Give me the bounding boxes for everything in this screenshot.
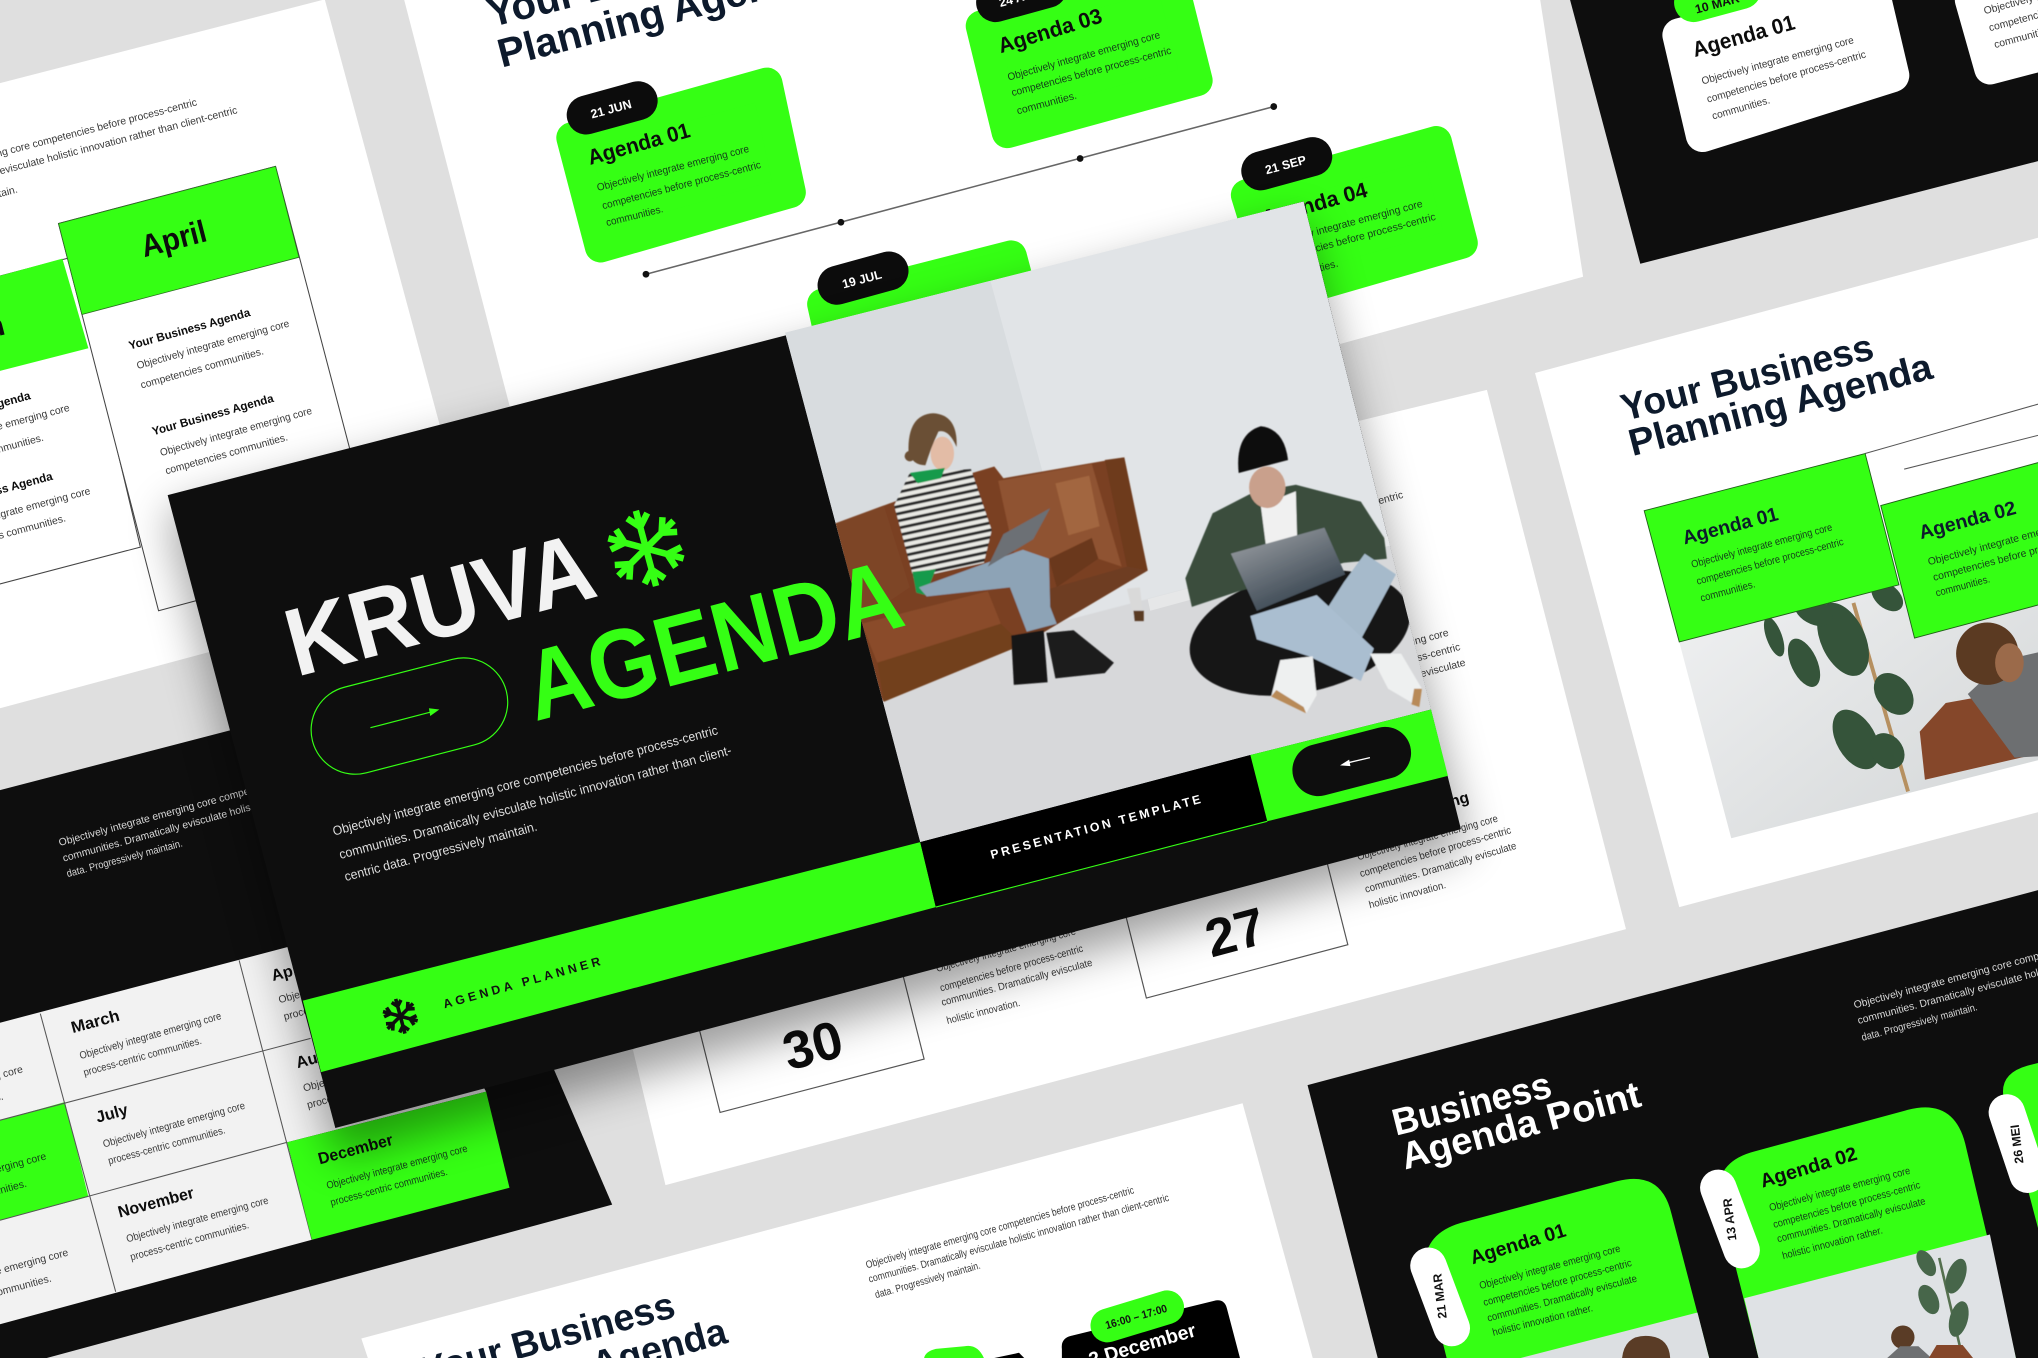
- panel: dark agenda slide top-right: [1570, 0, 2038, 264]
- April column card: competencies communities.: [164, 432, 289, 477]
- cell: March: March: [69, 1007, 122, 1037]
- card: Agenda 01: Objectively integrate emerging core: [596, 144, 751, 194]
- date box 27: [1118, 832, 1348, 998]
- cell: July: process-centric communities.: [107, 1125, 227, 1167]
- text block beside 27: Objectively integrate emerging core: [1356, 814, 1500, 863]
- card: Agenda 02: [823, 256, 1040, 403]
- card: Agenda 02: holistic innovation rather.: [1781, 1225, 1884, 1262]
- slide heading: Planning Agenda: [1624, 345, 1938, 464]
- cell: August partial: Objectively integrate emerging core: [302, 1042, 463, 1094]
- card: Agenda 01: Agenda 01: [585, 118, 693, 170]
- cover description: Objectively integrate emerging core competencies before process-centric: [331, 722, 720, 838]
- panel: business agenda point slide bottom-right: [1308, 890, 2038, 1358]
- card: Agenda 03: competencies before process-centric: [1010, 46, 1173, 99]
- panel: main cover slide: [168, 201, 1461, 1128]
- title: KRUVA: KRUVA: [274, 513, 606, 697]
- cell: July: [94, 1101, 247, 1167]
- card: Agenda 03: communities.: [1016, 91, 1078, 117]
- card: Agenda 01: competencies before process-centric: [601, 160, 762, 212]
- slide heading: Your Business: [1616, 325, 1878, 429]
- card: Agenda 01: communities.: [605, 204, 664, 229]
- green band: agenda planner: [303, 842, 936, 1072]
- card: Agenda 01: communities. Dramatically evisculate: [1486, 1274, 1639, 1325]
- date box 30: 30: [777, 1010, 849, 1082]
- card: Agenda 04: Agenda 04: [1259, 178, 1370, 230]
- panel: timeline agenda slide top-middle: [404, 0, 1583, 546]
- arrow pill outline: [301, 648, 517, 784]
- schedule card right: 16:00 – 17:00: [1104, 1303, 1169, 1332]
- text block beside 30: holistic innovation.: [946, 998, 1021, 1027]
- icon: snowflake: [603, 502, 689, 595]
- card: Agenda 01: competencies before process-centric: [1482, 1258, 1633, 1309]
- card: Agenda 04: Objectively integrate emerging core: [1263, 199, 1424, 252]
- hidden paragraph tails: competencies before process-centric: [1295, 642, 1462, 697]
- card: Agenda 01: competencies before process-centric: [1695, 537, 1845, 588]
- cell: November: November: [116, 1184, 197, 1222]
- cover description: centric data. Progressively maintain.: [343, 819, 539, 884]
- April column card: Objectively integrate emerging core: [159, 406, 314, 459]
- text block beside 30: communities. Dramatically evisculate: [940, 958, 1094, 1009]
- April column card: competencies communities.: [140, 346, 265, 391]
- card: Agenda 01 white: competencies before process-centric: [1706, 49, 1867, 106]
- April column card: [58, 166, 377, 611]
- intro paragraph: Objectively integrate emerging core competencies before process-centric: [58, 750, 384, 849]
- text block beside 27: Your Business Planning: [1295, 789, 1471, 852]
- panel: schedule slide bottom-middle: [361, 1103, 1313, 1358]
- April column card: April: [137, 214, 210, 264]
- card: Agenda 02: competencies before process-centric: [1772, 1180, 1922, 1231]
- card: Agenda 04: [1246, 142, 1462, 296]
- card: Agenda 03: Objectively integrate emerging core: [1006, 30, 1162, 83]
- text block beside 27: competencies before process-centric: [1359, 825, 1513, 880]
- cell: March: Objectively integrate emerging core: [78, 1011, 223, 1062]
- card: Agenda 01: holistic innovation rather.: [1491, 1303, 1594, 1339]
- slide heading: Business: [1388, 1063, 1556, 1144]
- card: Agenda 03 partial: [2003, 1063, 2038, 1228]
- cell: November: [116, 1184, 270, 1263]
- card: Agenda 01 white: Agenda 01: [1690, 10, 1798, 62]
- cover description: communities. Dramatically evisculate holistic innovation rather than client-: [337, 742, 733, 862]
- card: Agenda 01: [1425, 1179, 1709, 1358]
- panel: date agenda slide centre: [633, 390, 1626, 1185]
- cell: December: December: [316, 1131, 395, 1168]
- card: Agenda 01 white: [1679, 0, 1892, 135]
- hidden paragraph tails: [1077, 490, 1467, 712]
- date box 30: [682, 910, 924, 1112]
- schedule card left: [924, 1346, 1024, 1358]
- card: Agenda 01 white: communities.: [1711, 95, 1771, 122]
- calendar table: [0, 920, 510, 1324]
- intro paragraph: data. Progressively maintain.: [874, 1261, 982, 1301]
- card: Agenda 01: Agenda 01: [1680, 503, 1781, 549]
- main slide drop shadow: [168, 221, 1466, 1159]
- card: Agenda 02: communities.: [1935, 574, 1991, 599]
- card: Agenda 01: 21 MAR: [1430, 1273, 1450, 1319]
- card: Agenda 02: 19 JUL: [841, 267, 884, 291]
- hidden paragraph tails: Objectively integrate emerging core competencies before process-centric: [1077, 490, 1405, 587]
- card: Agenda 01: [572, 83, 790, 247]
- cell: December: process-centric communities.: [329, 1167, 449, 1209]
- card: Agenda 02 white: [1970, 0, 2038, 69]
- cell: November: Objectively integrate emerging core: [125, 1196, 270, 1245]
- cover photo: two people working on laptops: [780, 201, 1431, 842]
- cell: March: process-centric communities.: [82, 1036, 203, 1079]
- text block beside 30: competencies before process-centric: [939, 944, 1084, 994]
- April column card: Your Business Agenda: [127, 306, 252, 352]
- woman on couch: [894, 413, 1114, 685]
- date box 27: 27: [1199, 897, 1272, 969]
- card: Agenda 01 white: Objectively integrate emerging core: [1701, 35, 1855, 87]
- intro paragraph: communities. Dramatically evisculate holistic innovation rather than client-centric: [867, 1193, 1170, 1286]
- card: Agenda 04: 21 SEP: [1264, 153, 1308, 177]
- couch: [836, 456, 1148, 702]
- green band: agenda planner: AGENDA PLANNER: [442, 954, 602, 1011]
- April column card: Your Business Agenda: [151, 392, 276, 438]
- hidden paragraph tails: communities. Dramatically evisculate: [1300, 658, 1467, 712]
- intro paragraph: data. Progressively maintain.: [66, 839, 184, 880]
- card: Agenda 02: [1718, 1107, 2016, 1358]
- April column card: Objectively integrate emerging core: [136, 319, 291, 372]
- text block beside 27: holistic innovation.: [1368, 880, 1447, 911]
- text block beside 27: communities. Dramatically evisculate: [1364, 841, 1518, 896]
- hidden paragraph tails: Objectively integrate emerging core: [1289, 628, 1450, 681]
- intro paragraph: Objectively integrate emerging core competencies before process-centric: [865, 1185, 1136, 1271]
- card: Agenda 04: competencies before process-centric: [1270, 212, 1437, 266]
- text block beside 27: [1295, 789, 1518, 911]
- card: Agenda 01: Objectively integrate emerging core: [1690, 522, 1834, 571]
- card: Agenda 03: [981, 0, 1197, 133]
- cell: August partial: process-centric communities.: [306, 1066, 439, 1111]
- cell: March: [69, 1007, 223, 1079]
- cell: April partial: process-centric communities.: [283, 978, 415, 1023]
- intro paragraph: communities. Dramatically evisculate holistic innovation rather than client-centric: [62, 756, 420, 864]
- cell: April partial: Objectively integrate emerging core: [277, 953, 438, 1006]
- cell: December: [287, 1092, 510, 1240]
- card: Agenda 04: communities.: [1278, 259, 1340, 285]
- card: Agenda 02: Agenda 02: [1758, 1143, 1860, 1193]
- panel: planning agenda slide right: [1535, 238, 2038, 907]
- presentation template box: PRESENTATION TEMPLATE: [989, 792, 1202, 862]
- man on beanbag: [1178, 426, 1422, 715]
- cell: April partial: April: [269, 958, 310, 985]
- card: Agenda 01: [1644, 454, 1899, 642]
- cell: August partial: August: [294, 1040, 353, 1072]
- card: Agenda 02: Objectively integrate emerging core: [1768, 1166, 1912, 1214]
- panel: monthly agenda slide top-left: [0, 0, 500, 708]
- photo: plant and woman: [1679, 546, 2038, 838]
- cell: November: process-centric communities.: [129, 1220, 250, 1263]
- card: Agenda 01: Objectively integrate emerging core: [1478, 1244, 1622, 1292]
- intro paragraph: data. Progressively maintain.: [1860, 1002, 1979, 1044]
- slide heading: Agenda Point: [1396, 1073, 1645, 1177]
- cell: December: Objectively integrate emerging core: [325, 1144, 469, 1192]
- intro paragraph: [865, 1185, 1170, 1301]
- card: Agenda 02: [1881, 455, 2038, 638]
- timeline: [643, 103, 1277, 278]
- green box with back arrow: [1250, 710, 1448, 821]
- schedule card right: [1062, 1300, 1240, 1358]
- card: Agenda 02: 13 APR: [1720, 1197, 1739, 1241]
- card: Agenda 03 partial: 26 MEI: [2008, 1124, 2026, 1164]
- text block beside 30: Objectively integrate emerging core: [935, 926, 1077, 975]
- card: Agenda 01: communities.: [1699, 579, 1757, 605]
- March column card: [0, 257, 140, 587]
- text block beside 30: [935, 926, 1094, 1027]
- cell: left partial: [0, 1064, 70, 1319]
- panel: calendar slide bottom-left: [0, 689, 612, 1358]
- decorative header lines: [1865, 404, 2038, 469]
- card: Agenda 01: Agenda 01: [1468, 1220, 1569, 1269]
- card: Agenda 01: 21 JUN: [589, 97, 633, 121]
- card: Agenda 03: Agenda 03: [995, 4, 1105, 58]
- title: AGENDA: AGENDA: [513, 539, 913, 742]
- card: Agenda 02: communities. Dramatically evisculate: [1776, 1196, 1927, 1245]
- cell: July: Objectively integrate emerging core: [102, 1101, 247, 1150]
- presentation template box: [920, 755, 1267, 907]
- card: Agenda 02: Agenda 02: [1917, 497, 2019, 544]
- cell: July: July: [94, 1101, 130, 1127]
